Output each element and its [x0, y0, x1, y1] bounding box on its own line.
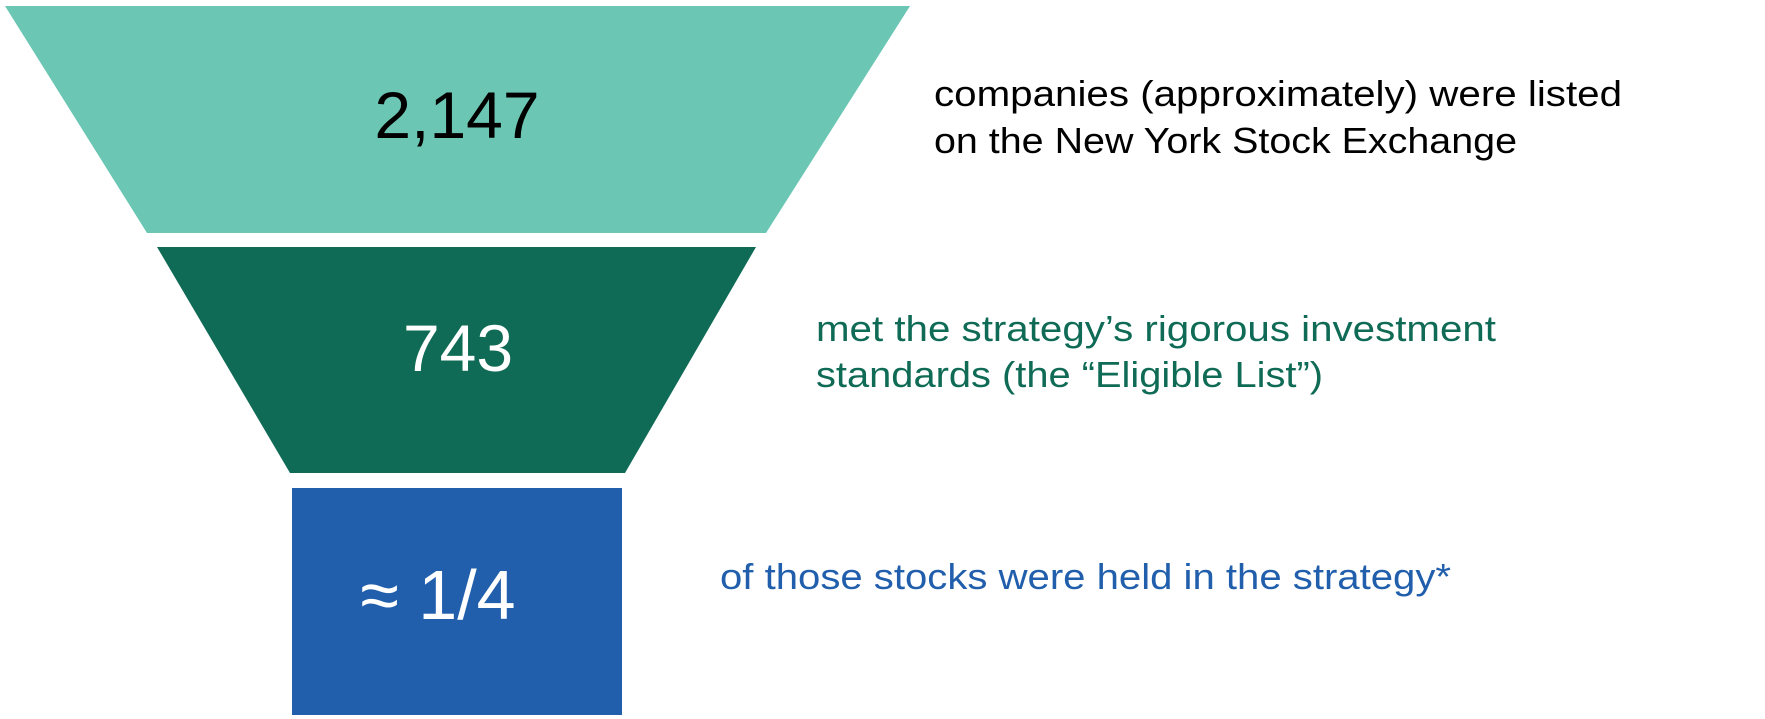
text: tier 2 description: met the strategy’s rigorous investment — [816, 308, 1496, 349]
text: tier 2 description: standards (the “Eligible List”) — [816, 354, 1323, 395]
number: approx 1/4: ≈ 1/4 — [360, 556, 516, 634]
number: 743: 743 — [403, 311, 513, 385]
text: tier 1 description: on the New York Stock Exchange — [934, 120, 1517, 161]
text: tier 2 description — [816, 308, 1496, 395]
text: tier 1 description — [934, 73, 1622, 161]
text: tier 1 description: companies (approximately) were listed — [934, 73, 1622, 114]
funnel tier 3: blue rectangle — [292, 488, 622, 715]
funnel tier 1: teal trapezoid — [5, 6, 910, 233]
text: tier 3 description: of those stocks were held in the strategy* — [720, 556, 1451, 597]
funnel tier 2: dark green trapezoid — [157, 247, 756, 473]
number: 2,147: 2,147 — [374, 78, 540, 152]
